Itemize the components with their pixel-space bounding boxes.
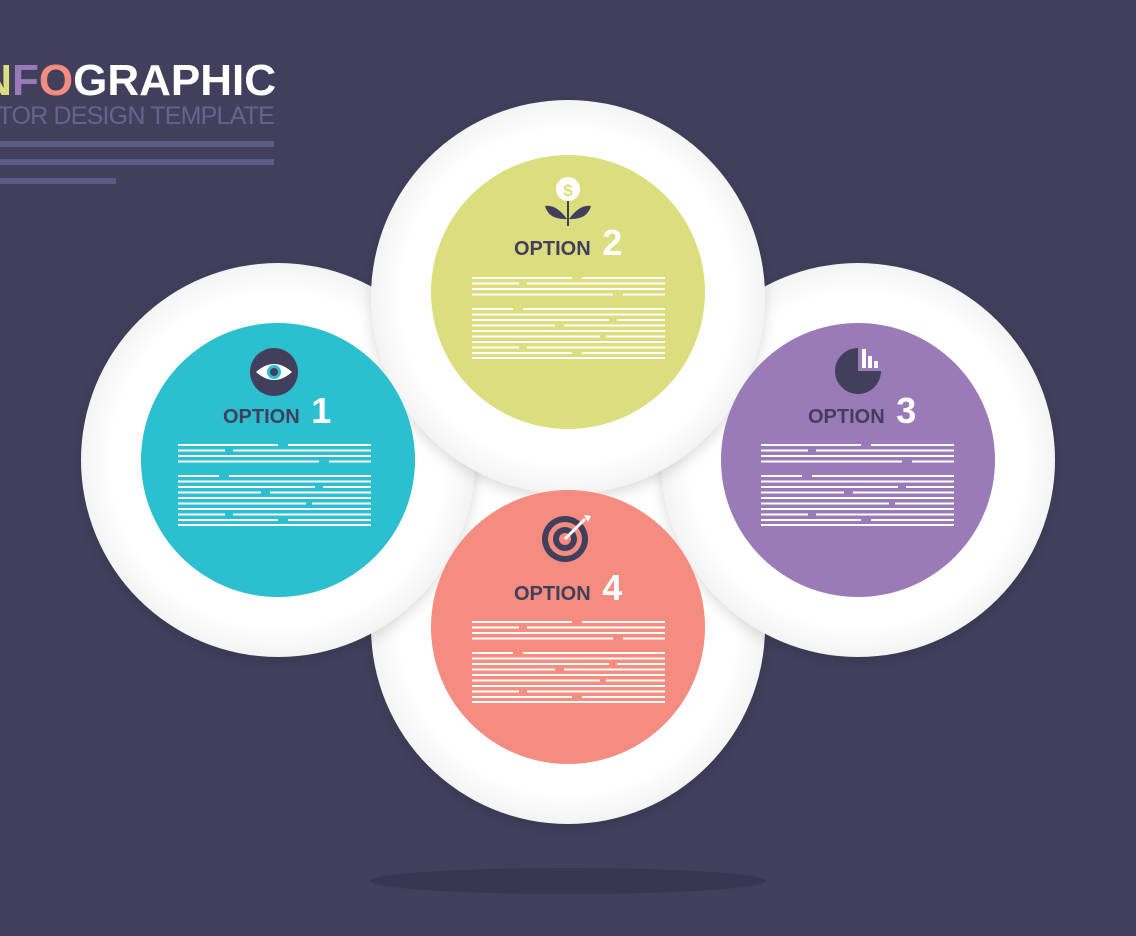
heading: option 2: OPTION 2 <box>514 222 622 263</box>
text block <box>472 621 665 703</box>
panel: option 4 <box>431 490 705 764</box>
floor shadow <box>370 868 766 894</box>
heading: option 1: OPTION 1 <box>223 390 331 431</box>
heading: option 4: OPTION 4 <box>514 567 622 608</box>
panel: option 2 <box>431 155 705 429</box>
panel: option 1 white ring <box>81 263 475 657</box>
panel: option 2 white ring <box>371 100 765 494</box>
icon: pie chart <box>835 348 881 394</box>
text block <box>178 444 371 526</box>
panel: option 3 <box>721 323 995 597</box>
heading: option 3: OPTION 3 <box>808 390 916 431</box>
icon: money plant: $ <box>563 181 573 200</box>
icon: target <box>542 515 591 562</box>
icon: eye <box>250 348 298 396</box>
panel: option 1 <box>141 323 415 597</box>
title underline bars <box>0 141 274 184</box>
panel: option 3 white ring <box>661 263 1055 657</box>
panel: option 4 white ring <box>371 430 765 824</box>
icon: money plant <box>545 177 591 226</box>
text block <box>761 444 954 526</box>
text block <box>472 277 665 359</box>
